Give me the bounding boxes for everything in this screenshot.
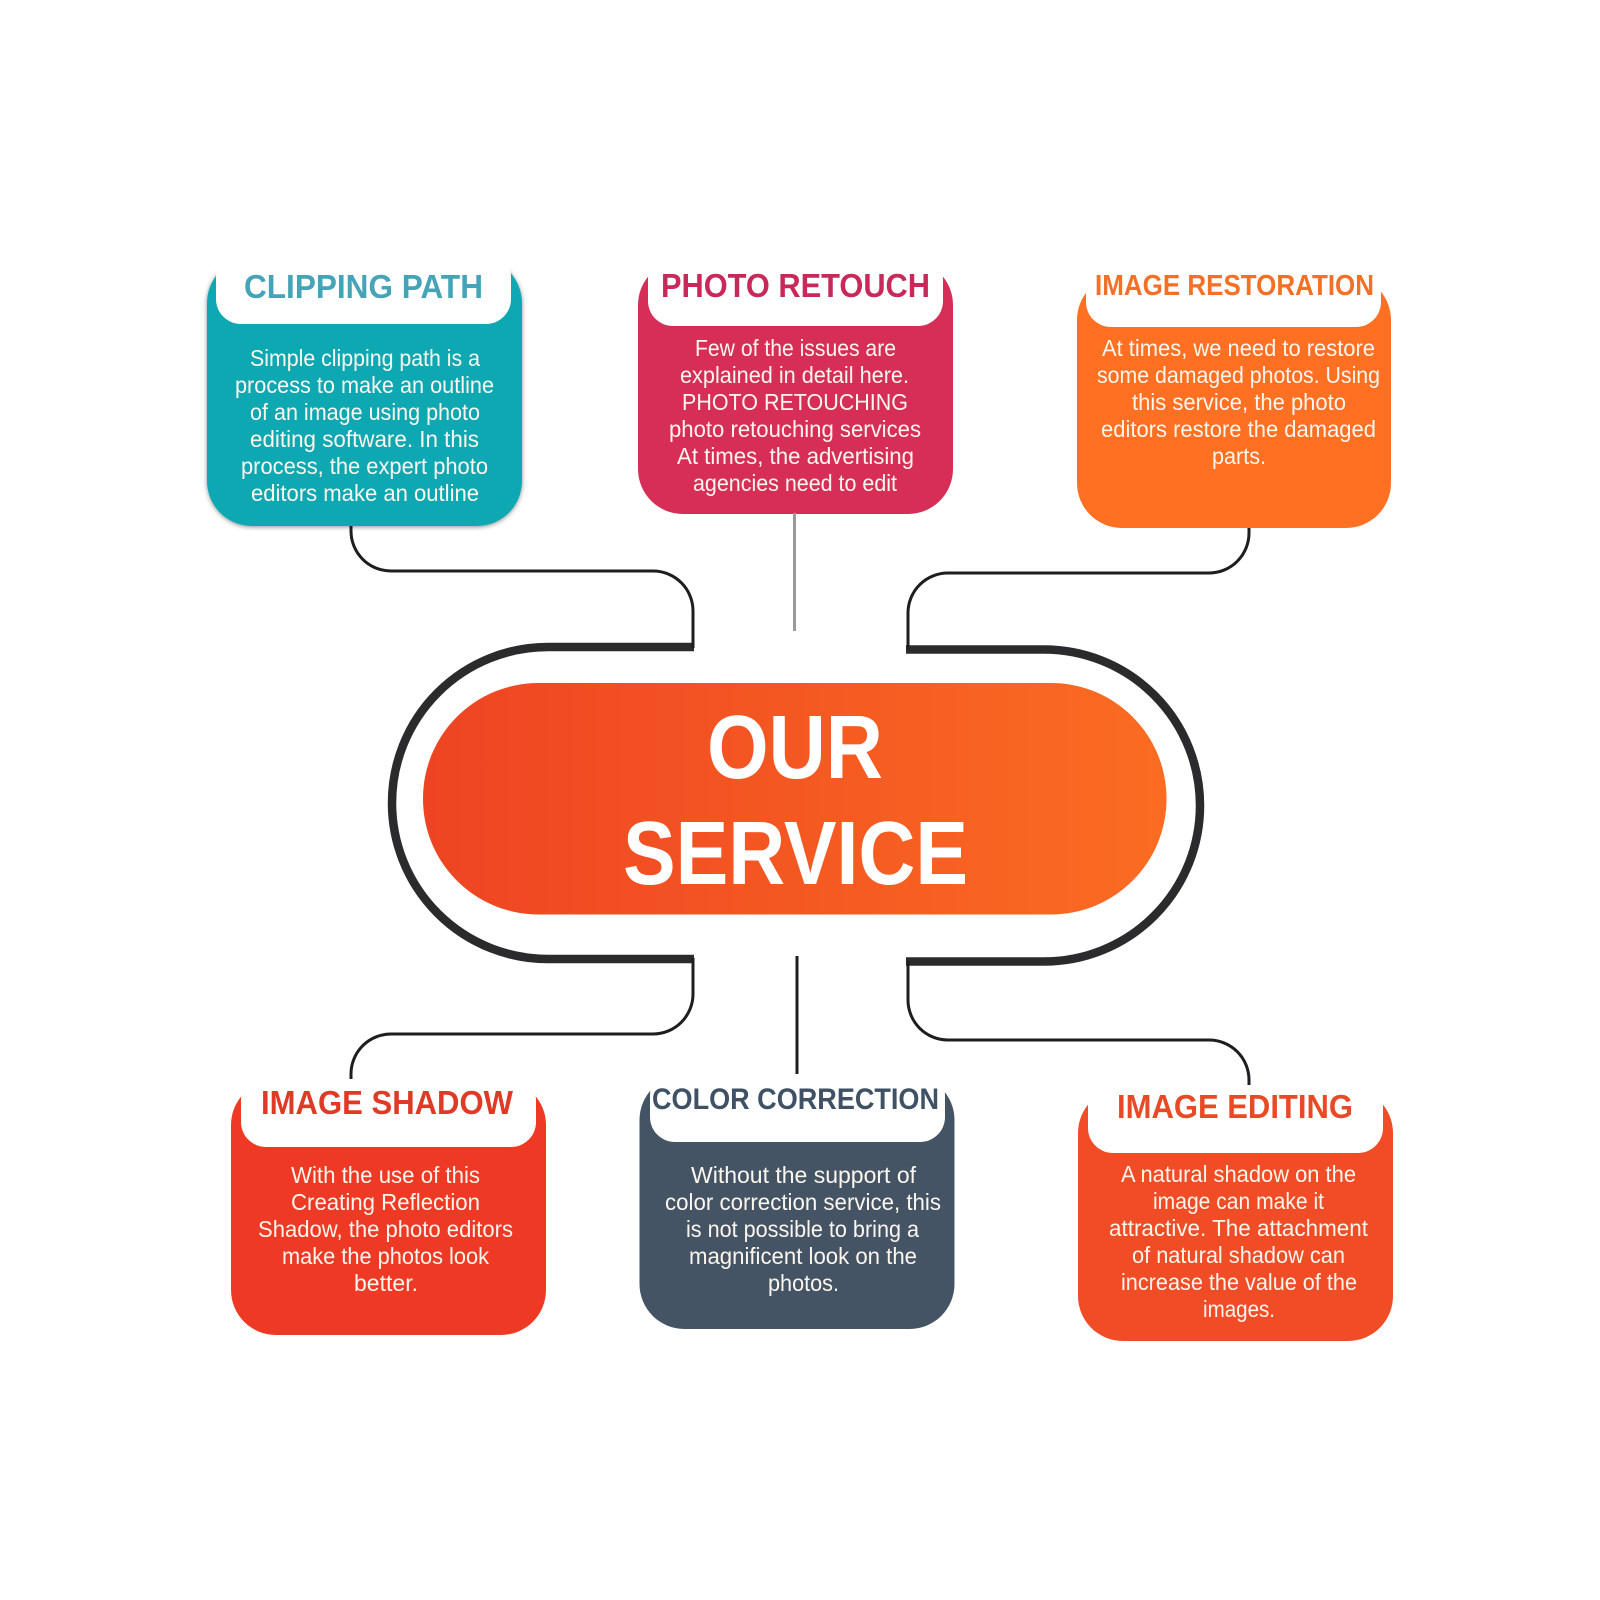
connector: image restoration to ring [908,528,1249,650]
panel: photo retouch [638,254,953,514]
body text: attractive. The attachment [1109,1215,1368,1241]
body text: of an image using photo [250,399,480,425]
header tab [1086,255,1381,327]
body text: parts. [1212,443,1266,469]
body text: photos. [768,1270,839,1296]
body text: images. [1203,1296,1275,1322]
body text: Simple clipping path is a [250,345,481,371]
body text: magnificent look on the [689,1243,917,1269]
central pill: our service [423,683,1166,914]
body text: better. [354,1270,418,1296]
body text: editors restore the damaged [1101,416,1376,442]
panel: image shadow [231,1075,546,1335]
body text: photo retouching services [669,416,921,442]
body text: A natural shadow on the [1121,1161,1356,1187]
heading: CLIPPING PATH [244,268,483,305]
body text [669,335,921,496]
body text: editing software. In this [250,426,479,452]
body text [1109,1161,1368,1322]
body text: some damaged photos. Using [1097,362,1380,388]
panel: image editing [1078,1081,1393,1341]
panel: color correction [640,1070,954,1329]
heading: PHOTO RETOUCH [661,267,930,304]
header tab [1088,1081,1383,1153]
connector: color correction to ring [796,956,798,1074]
body text: make the photos look [282,1243,489,1269]
heading: IMAGE SHADOW [261,1084,514,1121]
connector: photo retouch to ring [793,513,796,631]
body text: process to make an outline [235,372,494,398]
body text: With the use of this [291,1162,480,1188]
body text: this service, the photo [1132,389,1346,415]
body text: Shadow, the photo editors [258,1216,513,1242]
body text: increase the value of the [1121,1269,1357,1295]
connector: clipping path to ring [351,526,693,648]
body text: color correction service, this [665,1189,941,1215]
header tab [216,252,511,324]
body text: At times, we need to restore [1102,335,1375,361]
heading: COLOR CORRECTION [652,1083,939,1116]
panel: clipping path [207,252,522,526]
body text: explained in detail here. [680,362,909,388]
body text: image can make it [1153,1188,1324,1214]
header tab [650,1070,945,1142]
title: OUR: OUR [707,698,883,798]
body text: agencies need to edit [693,470,897,496]
body text: process, the expert photo [241,453,488,479]
body text: At times, the advertising [677,443,914,469]
body text [235,345,494,506]
heading: IMAGE RESTORATION [1095,270,1374,302]
title: SERVICE: SERVICE [623,804,968,904]
body text: Creating Reflection [291,1189,480,1215]
body text [258,1162,513,1296]
body text: editors make an outline [251,480,479,506]
connector: image editing to ring [908,961,1249,1085]
body text: Few of the issues are [695,335,896,361]
connector: image shadow to ring [351,958,693,1079]
body text: Without the support of [691,1162,916,1188]
header tab [241,1075,536,1147]
body text [665,1162,941,1296]
body text: of natural shadow can [1132,1242,1345,1268]
body text [1097,335,1380,469]
header tab [648,254,943,326]
panel: image restoration [1077,255,1391,528]
right ring bracket [906,650,1200,962]
body text: PHOTO RETOUCHING [682,389,908,415]
left ring bracket [392,647,694,959]
body text: is not possible to bring a [686,1216,920,1242]
heading: IMAGE EDITING [1117,1088,1353,1125]
